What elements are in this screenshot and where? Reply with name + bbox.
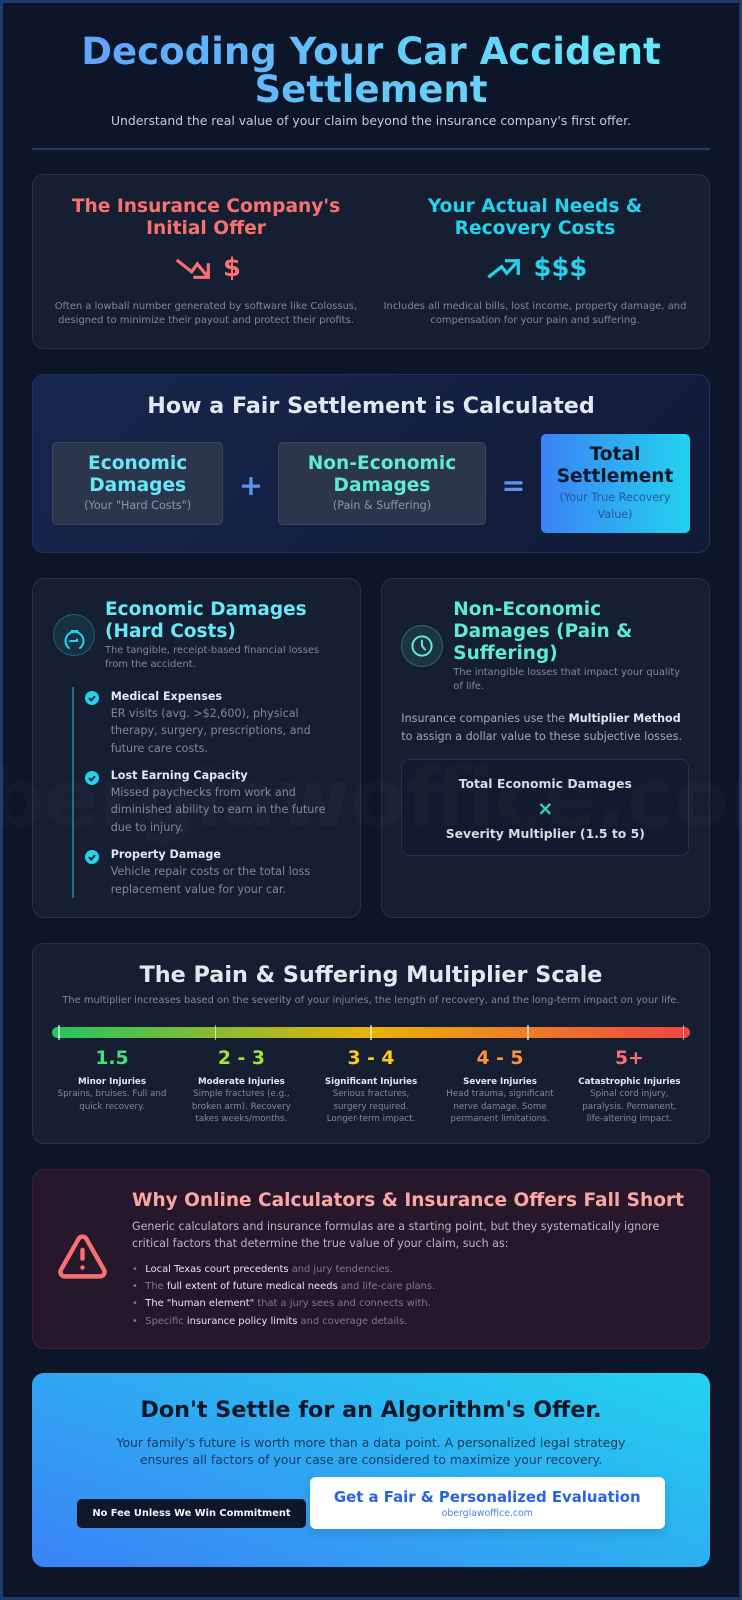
scale level: severe injuries: Severe Injuries [463,1077,537,1087]
gradient severity bar [52,1027,690,1038]
bullet list: ignored factors [132,1264,435,1327]
scale level: moderate injuries: Moderate Injuries [198,1077,285,1087]
formula box: Severity Multiplier (1.5 to 5) [446,826,645,841]
heading: economic damages: (Hard Costs) [105,621,236,642]
heading: non-economic damages [453,599,632,664]
icon: gauge [53,614,95,656]
text: insurance offer description [55,301,357,326]
bullet list: ignored factors: • [132,1316,138,1327]
scale level: severe injuries: nerve damage. Some [453,1102,547,1112]
scale level: significant injuries: 3 - 4 [347,1048,394,1069]
formula box: × [537,797,553,820]
heading: economic damages [105,599,307,642]
text: call to action message: ensures all factors of your case are considered to maximize your recovery. [140,1452,602,1467]
text: multiplier method explanation [401,712,682,743]
box: economic damages: Damages [89,475,186,496]
box: non-economic damages: (Pain & Suffering) [333,499,431,512]
text: insurance offer description: Often a lowball number generated by software like Colossus, [55,301,357,312]
panel: multiplier scale [32,943,710,1144]
text: insurance offer description: designed to minimize their payout and protect their profits. [58,315,354,326]
text: economic description: from the accident. [105,659,196,670]
list item: medical expenses: ER visits (avg. >$2,600), physical [111,707,299,720]
icon: trending up with triple dollar [487,253,587,283]
list item: medical expenses: therapy, surgery, prescriptions, and [111,724,311,737]
text: multiplier method explanation: to assign a dollar value to these subjective losses. [401,730,682,743]
list item: lost earning capacity: due to injury. [111,821,183,834]
text: generic calculators explanation: Generic calculators and insurance formulas are a starting point, but they systematically ignore [132,1220,659,1233]
button: personalized evaluation: oberglawoffice.com [442,1508,533,1519]
heading: multiplier scale: The Pain & Suffering Multiplier Scale [140,962,602,988]
scale level: severe injuries [446,1048,554,1124]
scale level: catastrophic injuries: Catastrophic Injuries [578,1077,681,1087]
box: economic damages [52,442,223,525]
panel: how a fair settlement is calculated [32,374,710,553]
heading: calculation: How a Fair Settlement is Calculated [147,393,595,419]
list item: lost earning capacity: Missed paychecks from work and [111,786,296,799]
scale level: significant injuries: surgery required. [334,1102,408,1112]
heading: non-economic damages: Damages (Pain & [453,621,632,642]
text: call to action message: Your family's future is worth more than a data point. A personalized legal strategy [117,1434,625,1450]
box: non-economic damages: Damages [334,475,430,496]
box: total settlement: Total [590,444,640,465]
operator: plus: + [239,468,263,502]
button: personalized evaluation: Get a Fair & Personalized Evaluation [334,1488,641,1506]
text: actual needs description: Includes all medical bills, lost income, property damage, and [384,301,686,312]
formula box: Total Economic Damages [459,776,632,791]
scale level: catastrophic injuries: paralysis. Permanent, [582,1102,677,1112]
list item: lost earning capacity: Lost Earning Capacity [111,769,248,782]
icon: warning triangle [58,1234,107,1279]
bullet list: ignored factors: Specific insurance policy limits and coverage details. [145,1316,407,1327]
panel: economic damages [32,578,361,918]
title [40,33,702,108]
scale level: moderate injuries: Simple fractures (e.g., [193,1089,290,1099]
scale level: moderate injuries [192,1048,291,1124]
scale level: catastrophic injuries: 5+ [615,1048,644,1069]
scale level: severe injuries: permanent limitations. [451,1114,549,1124]
scale level: minor injuries [58,1048,166,1112]
text: non-economic description: of life. [453,681,484,692]
box: non-economic damages [278,442,486,525]
scale level: significant injuries: Longer-term impact. [327,1114,415,1124]
icon: clock [401,625,443,667]
heading: non-economic damages: Non-Economic [453,599,601,620]
heading: actual needs: Your Actual Needs & [428,196,642,216]
scale level: catastrophic injuries [578,1048,681,1124]
bullet list: ignored factors: • [132,1281,138,1292]
bullet list: ignored factors: • [132,1298,138,1309]
button: personalized evaluation [310,1477,664,1529]
bullet list: ignored factors: The full extent of future medical needs and life-care plans. [145,1281,435,1292]
scale level: severe injuries: 4 - 5 [476,1048,524,1069]
scale level: significant injuries [325,1048,417,1124]
badge: no fee commitment: No Fee Unless We Win Commitment [92,1508,291,1519]
text: actual needs description: compensation for your pain and suffering. [430,315,640,326]
list item: lost earning capacity: diminished ability to earn in the future [111,803,326,816]
heading: non-economic damages: Suffering) [453,643,558,664]
text: multiplier method explanation: Insurance companies use the Multiplier Method [401,712,681,725]
list item: lost earning capacity [85,769,326,834]
badge: no fee commitment [77,1499,306,1528]
box: total settlement: Value) [597,508,633,521]
title: Decoding Your Car Accident [81,30,661,73]
scale level: severe injuries: Head trauma, significant [446,1089,554,1099]
icon: trending down with single dollar: $ [223,253,241,283]
text: generic calculators explanation: critical factors that determine the true value of your claim, such as: [132,1237,508,1250]
list item: property damage: Property Damage [111,848,221,861]
bullet list: ignored factors: Local Texas court precedents and jury tendencies. [145,1264,393,1275]
bullet list: ignored factors: • [132,1264,138,1275]
box: economic damages: Economic [88,453,187,474]
text: actual needs description [384,301,686,326]
text: generic calculators explanation [132,1220,659,1250]
text: non-economic description: The intangible losses that impact your quality [453,667,680,678]
heading: fall short: Why Online Calculators & Insurance Offers Fall Short [132,1190,684,1211]
text: call to action message [116,1434,625,1467]
scale level: significant injuries: Serious fractures, [333,1089,409,1099]
list item: medical expenses [85,690,311,755]
text: non-economic description [453,667,680,692]
box: total settlement: (Your True Recovery [560,491,670,504]
icon: trending down with single dollar [176,253,241,283]
scale level: minor injuries: Minor Injuries [78,1077,146,1087]
panel: call to action [32,1373,710,1567]
heading: insurance initial offer [72,196,340,239]
text: scale description: The multiplier increases based on the severity of your injuries, the length of recovery, and the long-term impact on your life. [62,995,680,1006]
title: Settlement [254,68,488,110]
scale level: minor injuries: Sprains, bruises. Full and [58,1089,166,1099]
panel: why calculators fall short [32,1169,710,1349]
list item: property damage: replacement value for your car. [111,883,286,896]
formula box [401,759,689,856]
heading: call to action: Don't Settle for an Algorithm's Offer. [140,1397,602,1423]
operator: equals: = [501,468,526,502]
list item: medical expenses: Medical Expenses [111,690,222,703]
scale level: moderate injuries: 2 - 3 [218,1048,265,1069]
icon: trending up with triple dollar: $$$ [534,253,587,283]
heading: economic damages: Economic Damages [105,599,307,620]
scale level: moderate injuries: takes weeks/months. [195,1114,287,1124]
panel: non-economic damages [381,578,710,918]
panel: offer versus needs comparison [32,174,710,349]
box: total settlement: Settlement [557,466,673,487]
box: total settlement [540,434,690,533]
scale level: moderate injuries: broken arm). Recovery [192,1102,291,1112]
text: economic description: The tangible, receipt-based financial losses [105,645,319,656]
box: economic damages: (Your "Hard Costs") [84,499,191,512]
heading: insurance initial offer: The Insurance Company's [72,196,340,216]
heading: actual needs: Recovery Costs [455,218,615,239]
heading: insurance initial offer: Initial Offer [146,218,266,239]
scale level: significant injuries: Significant Injuries [325,1077,417,1087]
scale level: catastrophic injuries: Spinal cord injury, [590,1089,669,1099]
list item: property damage: Vehicle repair costs or the total loss [111,865,310,878]
bullet list: ignored factors: The "human element" that a jury sees and connects with. [145,1298,431,1309]
scale level: minor injuries: quick recovery. [79,1102,145,1112]
heading: actual needs [428,196,642,239]
scale level: catastrophic injuries: life-altering impact. [587,1114,672,1124]
box: non-economic damages: Non-Economic [308,453,456,474]
list item: property damage [85,848,310,896]
subtitle: Understand the real value of your claim beyond the insurance company's first offer. [111,113,631,128]
text: economic description [105,645,319,670]
list item: medical expenses: future care costs. [111,742,208,755]
scale level: minor injuries: 1.5 [95,1048,129,1069]
